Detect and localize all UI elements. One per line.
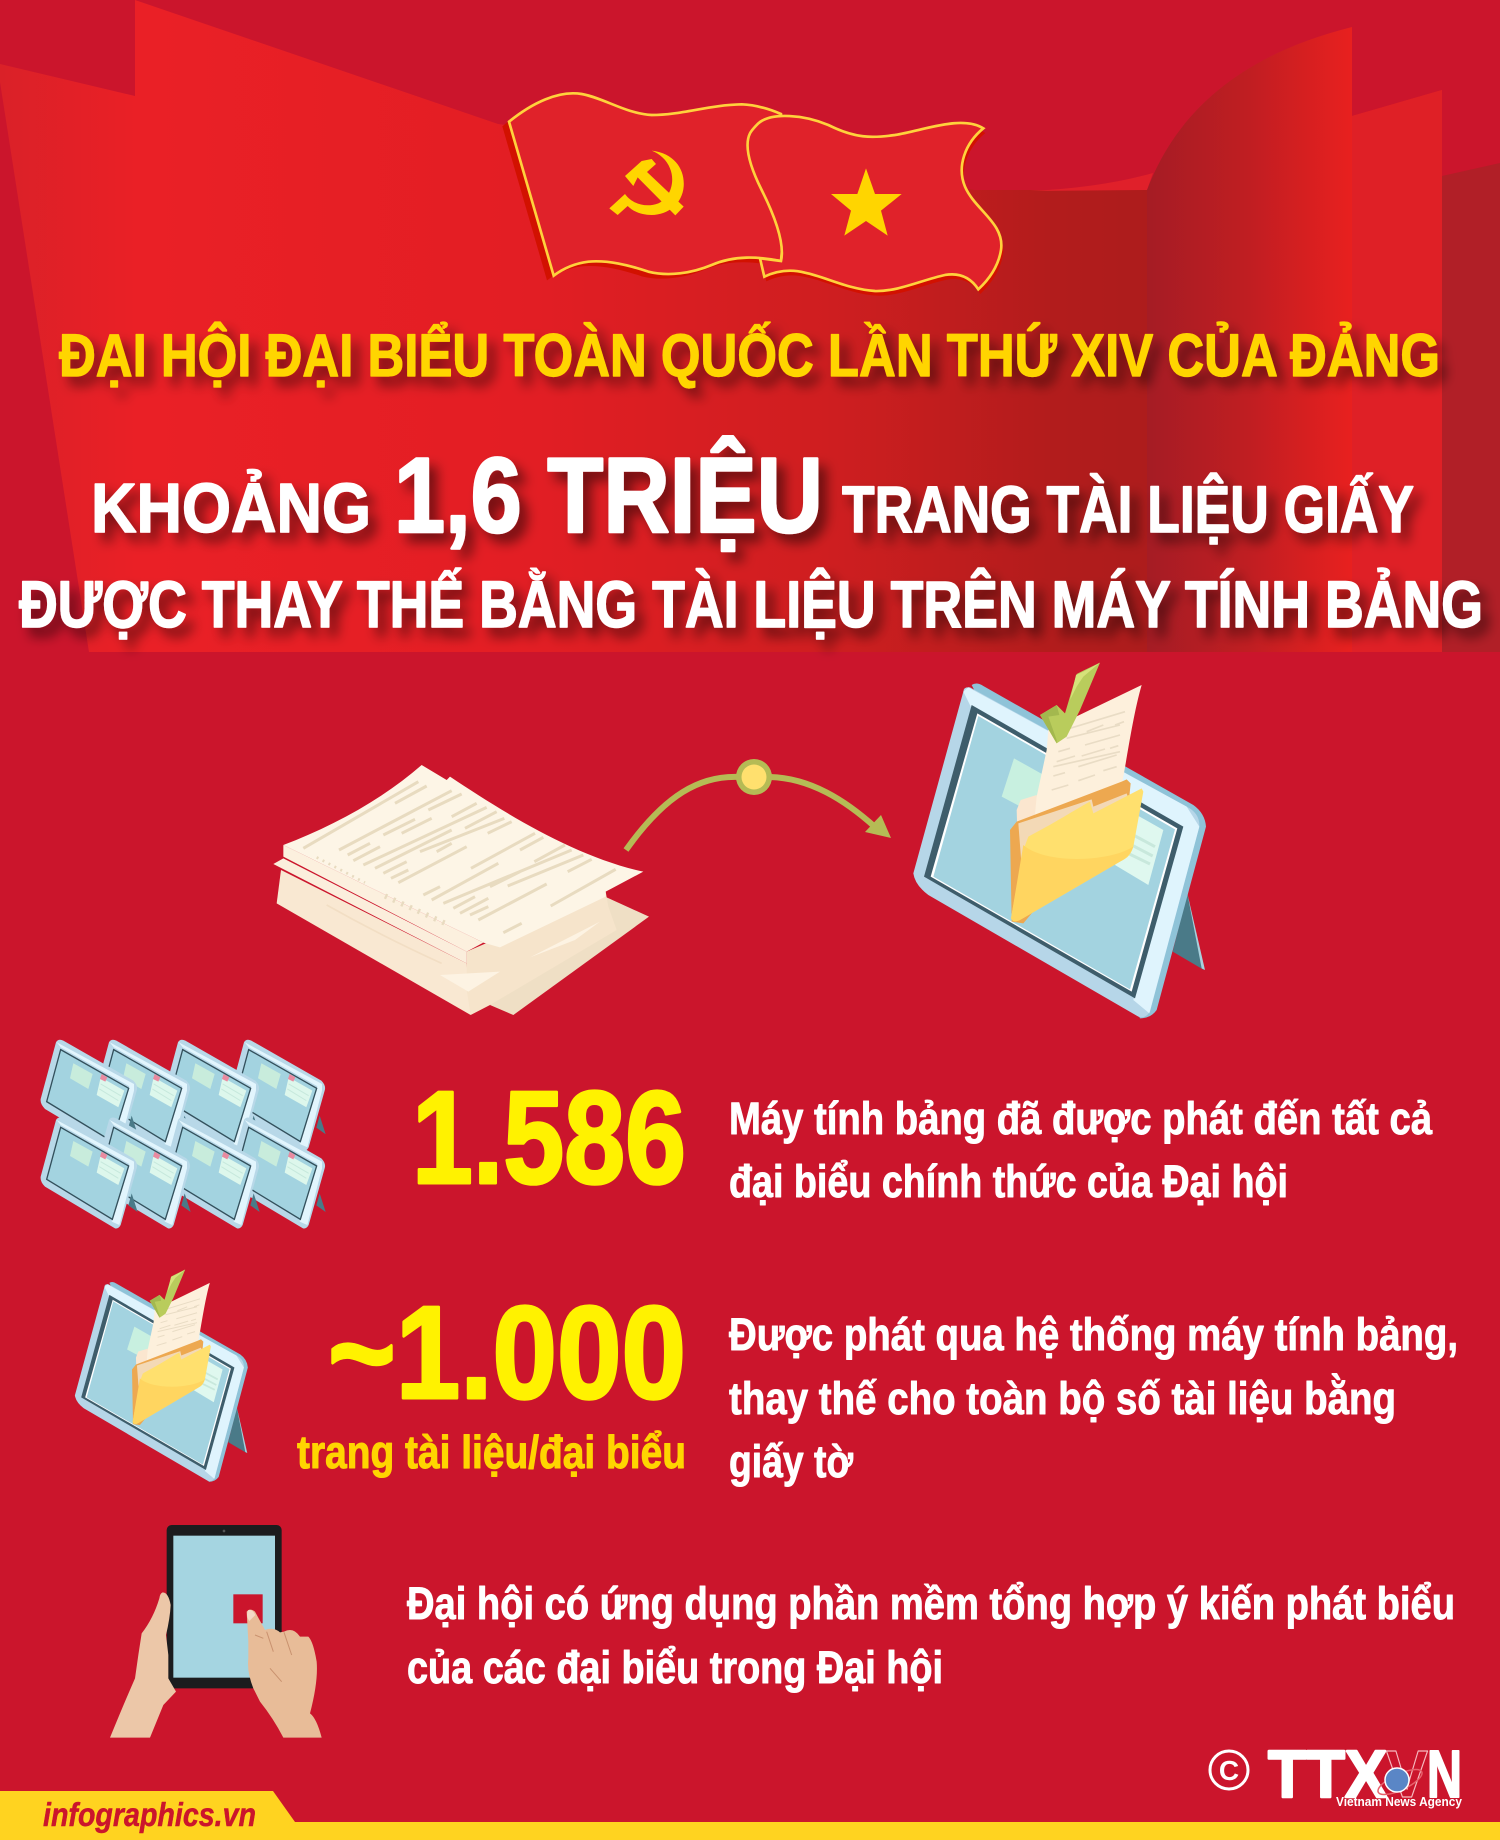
text: software note: của các đại biểu trong Đại hội [407,1642,943,1693]
stat: 1.000: ~1.000 [328,1279,686,1426]
text: stat 1 description: đại biểu chính thức của Đại hội [729,1156,1288,1207]
headline [19,435,1483,641]
icon: hands holding tablet [110,1525,322,1738]
footer bar [0,1791,1500,1840]
footer url: infographics.vn [43,1796,256,1833]
stat unit: trang tài liệu/đại biểu [297,1426,686,1478]
text: stat 2 description: thay thế cho toàn bộ số tài liệu bằng [729,1373,1396,1424]
headline: KHOẢNG [91,469,371,547]
logo: TTXVN: C [1219,1755,1239,1786]
flag: party [509,93,788,276]
icon: tablet with folder [913,663,1206,1018]
text: software note [407,1578,1455,1693]
text: stat 2 description [729,1309,1458,1487]
flag: star [748,116,1001,291]
arrow [626,759,891,850]
logo: TTXVN: Vietnam News Agency [1336,1795,1462,1809]
icon: paper stack [273,765,649,1015]
flags [502,93,1003,296]
logo: TTXVN: V [1386,1737,1428,1812]
logo: TTXVN [1210,1737,1462,1812]
text: stat 1 description [729,1093,1433,1207]
stat: 1.586: 1.586 [412,1064,686,1211]
logo: TTXVN: TTX [1268,1737,1387,1812]
headline: 1,6 TRIỆU [394,435,823,555]
header banner shapes [0,0,1500,652]
icon: small tablet with folder [75,1270,248,1482]
text: stat 2 description: giấy tờ [729,1436,853,1487]
logo: TTXVN: N [1427,1737,1462,1812]
icon: tablet grid [41,1040,326,1229]
